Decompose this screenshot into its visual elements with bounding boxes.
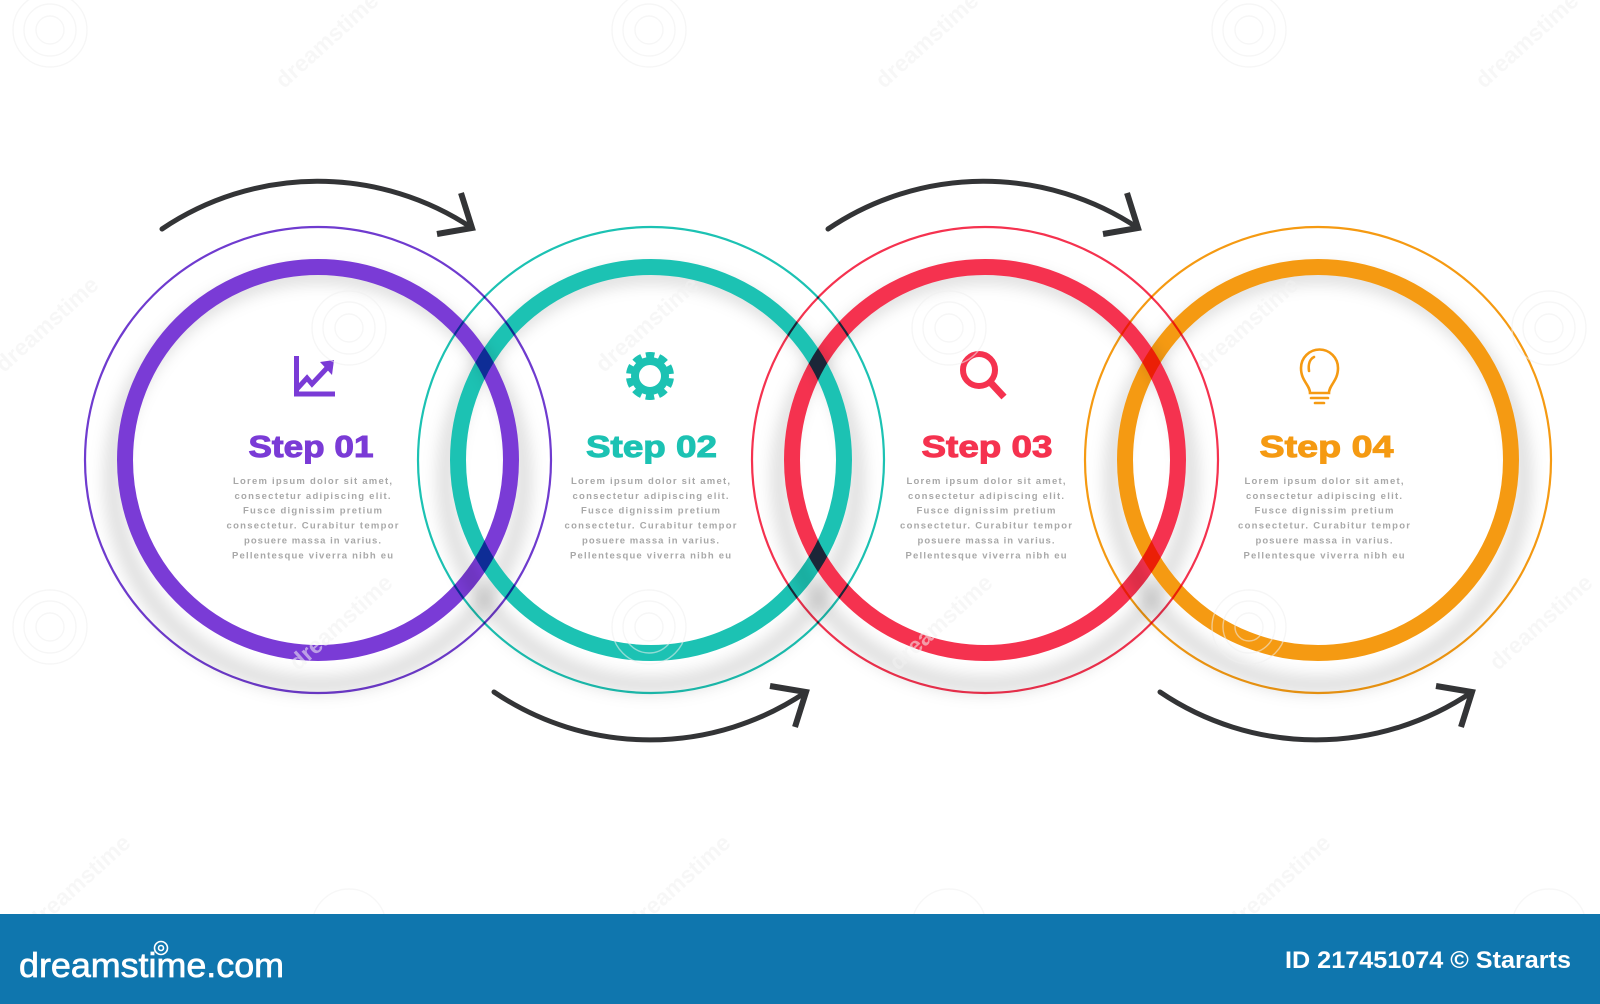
ring shadow teal xyxy=(446,275,856,685)
ring shadow purple xyxy=(113,275,523,685)
text block: step 2 description: consectetur adipiscing elit. xyxy=(572,491,728,502)
text block: step 1 description xyxy=(226,476,399,562)
text block: step 1 description: consectetur adipiscing elit. xyxy=(234,491,390,502)
thick ring orange xyxy=(1125,267,1511,653)
panel: step 1 xyxy=(85,227,551,693)
icon: logo spiral xyxy=(154,942,168,954)
arrow: step 3 to step 4 xyxy=(828,181,1138,234)
icon: light bulb xyxy=(1301,350,1338,403)
watermark pattern: dreamstime xyxy=(622,829,735,935)
panel: step 2 xyxy=(418,227,884,693)
text block: step 1 description: consectetur. Curabitur tempor xyxy=(226,520,399,532)
text block: step 4 description: consectetur. Curabitur tempor xyxy=(1238,520,1410,532)
watermark pattern: dreamstime xyxy=(1222,829,1335,935)
footer banner xyxy=(0,914,1600,1004)
arrow: step 2 to step 3 xyxy=(494,686,806,740)
text block: step 3 description: posuere massa in varius. xyxy=(918,536,1054,546)
thin outer ring red xyxy=(752,227,1218,693)
panel: step 4 xyxy=(1085,227,1551,693)
image id and credit: ID 217451074 © Stararts xyxy=(1285,947,1571,974)
heading: Step 02: Step 02 xyxy=(586,429,717,464)
watermark pattern: dreamstime xyxy=(22,829,135,935)
watermark pattern: dreamstime xyxy=(284,569,397,675)
text block: step 2 description: consectetur. Curabitur tempor xyxy=(564,520,737,532)
text block: step 2 description: Lorem ipsum dolor sit amet, xyxy=(571,476,730,487)
heading: Step 03: Step 03 xyxy=(922,429,1052,464)
arrow: step 4 onward xyxy=(1160,686,1472,740)
thin outer ring teal xyxy=(418,227,884,693)
text block: step 1 description: posuere massa in varius. xyxy=(244,536,381,546)
text block: step 4 description: Fusce dignissim pretium xyxy=(1254,506,1394,516)
thick ring teal xyxy=(458,267,844,653)
text block: step 1 description: Fusce dignissim pretium xyxy=(243,506,382,516)
text block: step 3 description: consectetur. Curabitur tempor xyxy=(900,520,1072,532)
text block: step 1 description: Lorem ipsum dolor sit amet, xyxy=(233,476,392,487)
text block: step 2 description: posuere massa in varius. xyxy=(582,536,719,546)
heading: Step 04: Step 04 xyxy=(1260,429,1394,464)
text block: step 2 description: Pellentesque viverra nibh eu xyxy=(570,550,731,562)
text block: step 4 description: consectetur adipiscing elit. xyxy=(1246,491,1402,502)
ring shadow red xyxy=(780,275,1190,685)
thin outer ring orange xyxy=(1085,227,1551,693)
text block: step 4 description: Lorem ipsum dolor sit amet, xyxy=(1244,476,1404,487)
logo text: dreamstime.com xyxy=(19,947,284,985)
text block: step 3 description: Pellentesque viverra nibh eu xyxy=(906,550,1067,562)
watermark pattern: dreamstime xyxy=(590,271,703,377)
text block: step 1 description: Pellentesque viverra nibh eu xyxy=(232,550,393,562)
watermark pattern: dreamstime xyxy=(884,569,997,675)
text block: step 3 description xyxy=(900,476,1072,562)
watermark pattern: dreamstime xyxy=(1190,271,1303,377)
text block: step 4 description: posuere massa in varius. xyxy=(1256,536,1392,546)
text block: step 3 description: Lorem ipsum dolor sit amet, xyxy=(906,476,1066,487)
text block: step 3 description: consectetur adipiscing elit. xyxy=(908,491,1064,502)
arrow: step 1 to step 2 xyxy=(162,181,472,234)
text block: step 3 description: Fusce dignissim pretium xyxy=(916,506,1056,516)
ring shadow orange xyxy=(1113,275,1523,685)
watermark pattern: dreamstime xyxy=(1484,569,1597,675)
text block: step 2 description xyxy=(564,476,737,562)
text block: step 4 description xyxy=(1238,476,1410,562)
icon: gear xyxy=(629,355,671,397)
text block: step 4 description: Pellentesque viverra nibh eu xyxy=(1244,550,1405,562)
thick ring purple xyxy=(125,267,511,653)
thin outer ring purple xyxy=(85,227,551,693)
thick ring red xyxy=(792,267,1178,653)
panel: step 3 xyxy=(752,227,1218,693)
icon: growth chart xyxy=(296,356,335,394)
text block: step 2 description: Fusce dignissim pretium xyxy=(581,506,720,516)
heading: Step 01: Step 01 xyxy=(248,429,374,464)
icon: magnifier xyxy=(963,354,1004,397)
